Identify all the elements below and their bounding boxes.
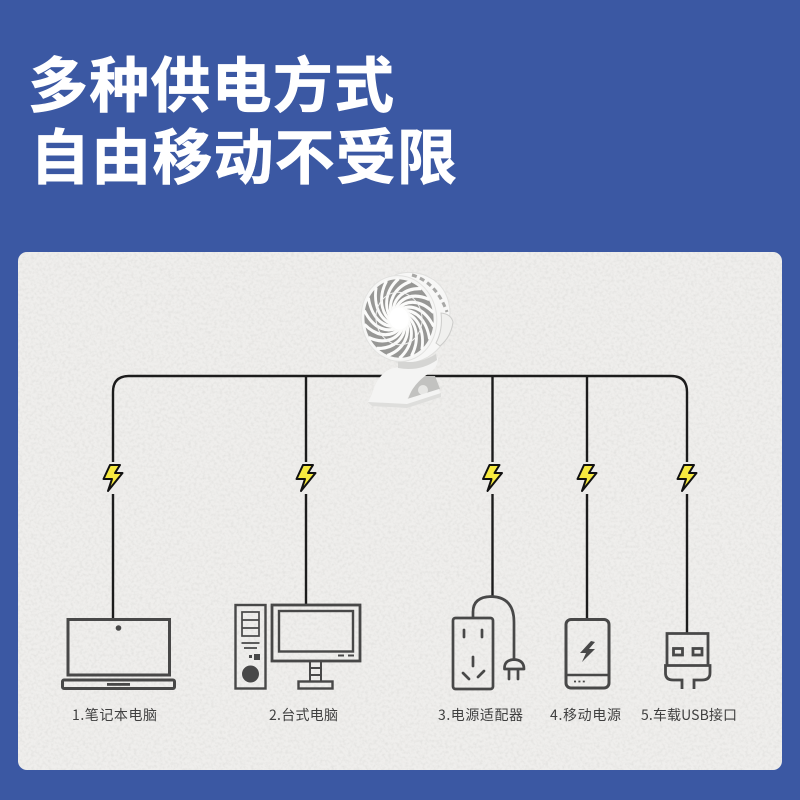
title line 1: 多种供电方式 — [28, 38, 394, 125]
icon: lightning bolt 4 — [577, 462, 597, 494]
fan blades — [356, 272, 442, 365]
fan neck — [398, 354, 437, 369]
fan hub — [388, 306, 410, 331]
icon: USB plug — [666, 634, 710, 689]
label 3: 3.电源适配器 — [438, 705, 523, 725]
icon: laptop — [62, 620, 174, 688]
fan face — [356, 271, 442, 366]
label 1: 1.笔记本电脑 — [72, 705, 157, 725]
labels — [72, 705, 737, 725]
icon: lightning bolt 5 — [677, 462, 697, 494]
label 5: 5.车载USB接口 — [641, 705, 737, 725]
icon: lightning bolt 2 — [296, 462, 316, 494]
icon: power adapter — [453, 596, 524, 689]
icon: lightning bolt 3 — [482, 462, 502, 494]
icon: power bank — [566, 620, 609, 688]
computer tower — [236, 605, 266, 688]
icon: desktop computer — [236, 605, 360, 688]
label 4: 4.移动电源 — [550, 705, 621, 725]
fan knob — [436, 313, 453, 346]
fan clip base — [368, 358, 441, 408]
title — [28, 38, 457, 197]
monitor — [272, 605, 360, 688]
label 2: 2.台式电脑 — [269, 705, 338, 725]
icon: lightning bolt 1 — [103, 462, 123, 494]
fan side grille — [412, 275, 447, 312]
title line 2: 自由移动不受限 — [30, 110, 457, 197]
fan rear housing — [395, 272, 450, 363]
fan product image — [356, 271, 453, 408]
connector lines — [113, 376, 687, 633]
panel: paper background — [18, 252, 782, 770]
